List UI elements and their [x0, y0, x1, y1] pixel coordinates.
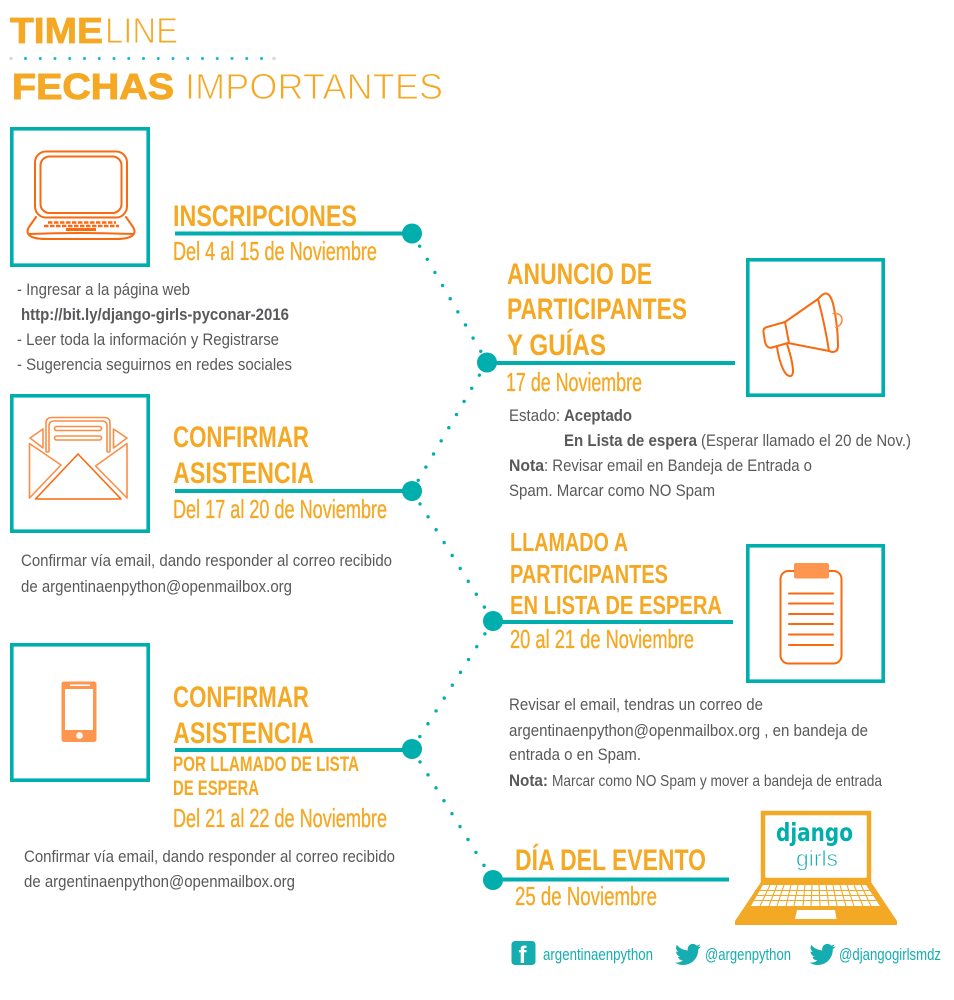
text block: revisar el email: entrada o en Spam. — [509, 745, 641, 764]
panel: inscripciones — [12, 129, 377, 374]
heading: anuncio de participantes y guias — [507, 258, 687, 362]
text block: estado: (Esperar llamado el 20 de Nov.) — [701, 431, 911, 450]
icon: laptop — [12, 129, 148, 265]
text block: revisar el email: Marcar como NO Spam y mover a bandeja de entrada — [552, 773, 882, 790]
heading: anuncio de participantes y guias: PARTICIPANTES — [507, 293, 687, 326]
heading: confirmar asistencia por llamado de lista de espera: DE ESPERA — [173, 777, 259, 800]
icon: twitter bird 2 — [810, 944, 835, 965]
icon: facebook: f — [518, 942, 528, 969]
heading: llamado a participantes en lista de espera: PARTICIPANTES — [510, 559, 668, 589]
title: timeline — [10, 10, 178, 51]
title: fechas importantes: FECHAS — [12, 66, 174, 107]
date: 25 de noviembre: 25 de Noviembre — [515, 881, 657, 911]
twitter handle: argenpython: @argenpython — [705, 945, 791, 964]
text block: inscripciones steps: - Ingresar a la página web — [17, 280, 190, 299]
text block: revisar el email: Revisar el email, tendras un correo de — [509, 695, 763, 714]
timeline connector: dots and lines — [175, 224, 735, 890]
date: del 17 al 20: Del 17 al 20 de Noviembre — [173, 494, 387, 524]
text block: estado: Nota — [509, 456, 545, 475]
icon: megaphone — [748, 260, 883, 395]
date: 17 de noviembre: 17 de Noviembre — [506, 367, 642, 397]
text block: revisar el email: argentinaenpython@openmailbox.org , en bandeja de — [509, 721, 868, 740]
text block: confirmar via email: de argentinaenpython@openmailbox.org — [21, 577, 292, 596]
heading: llamado a participantes en lista de espera: LLAMADO A — [510, 527, 628, 557]
text block: inscripciones steps: - Leer toda la información y Registrarse — [17, 330, 279, 349]
heading: anuncio de participantes y guias: Y GUÍAS — [507, 328, 606, 362]
date: 20 al 21: 20 al 21 de Noviembre — [510, 624, 694, 654]
header dotted divider — [9, 57, 276, 60]
text block: revisar el email: Nota: — [509, 771, 548, 790]
heading: llamado a participantes en lista de espera — [510, 527, 722, 620]
text block: confirmar via email lista de espera — [24, 847, 395, 891]
heading: dia del evento: DÍA DEL EVENTO — [515, 843, 706, 877]
title: fechas importantes: IMPORTANTES — [185, 66, 443, 107]
text block: estado: Estado: — [509, 406, 560, 425]
text block: confirmar via email lista de espera: de argentinaenpython@openmailbox.org — [24, 872, 295, 891]
icon: envelope — [12, 396, 148, 531]
title: timeline: TIME — [10, 10, 103, 51]
text block: inscripciones steps — [17, 280, 292, 374]
panel: confirmar asistencia por llamado — [12, 645, 395, 891]
icon: twitter bird 1 — [675, 944, 701, 965]
text block: confirmar via email lista de espera: Confirmar vía email, dando responder al correo recibido — [24, 847, 395, 866]
heading: llamado a participantes en lista de espera: EN LISTA DE ESPERA — [510, 590, 722, 620]
panel: dia del evento — [515, 813, 897, 925]
text block: estado: Aceptado — [564, 406, 632, 425]
social links — [512, 941, 941, 969]
panel: confirmar asistencia — [12, 396, 392, 596]
icon: smartphone — [12, 645, 148, 780]
date: inscripciones: Del 4 al 15 de Noviembre — [173, 236, 377, 266]
icon: django girls laptop: girls — [796, 846, 838, 871]
icon: facebook — [512, 941, 536, 969]
panel: llamado a participantes — [509, 527, 883, 790]
date: del 21 al 22: Del 21 al 22 de Noviembre — [173, 803, 387, 833]
text block: estado: En Lista de espera — [564, 431, 697, 450]
text block: confirmar via email — [21, 551, 392, 596]
heading: inscripciones: INSCRIPCIONES — [173, 200, 357, 233]
text block: revisar el email — [509, 695, 882, 790]
heading: confirmar asistencia por llamado de lista de espera: POR LLAMADO DE LISTA — [173, 753, 359, 776]
heading: confirmar asistencia por llamado de lista de espera: CONFIRMAR — [173, 681, 309, 714]
heading: confirmar asistencia: ASISTENCIA — [173, 457, 314, 490]
text block: inscripciones steps: http://bit.ly/django-girls-pyconar-2016 — [21, 305, 289, 324]
heading: anuncio de participantes y guias: ANUNCIO DE — [507, 258, 652, 291]
facebook handle: argentinaenpython — [543, 945, 653, 964]
title: timeline: LINE — [105, 10, 178, 51]
heading: confirmar asistencia por llamado de lista de espera: ASISTENCIA — [173, 717, 314, 750]
text block: estado — [509, 406, 911, 500]
text block: estado: Spam. Marcar como NO Spam — [509, 481, 715, 500]
icon: clipboard — [748, 546, 883, 681]
heading: confirmar asistencia: CONFIRMAR — [173, 421, 309, 454]
heading: confirmar asistencia por llamado de lista de espera — [173, 681, 359, 800]
icon: django girls laptop: django — [776, 818, 853, 847]
text block: estado: : Revisar email en Bandeja de Entrada o — [544, 456, 812, 475]
text block: inscripciones steps: - Sugerencia seguirnos en redes sociales — [17, 355, 292, 374]
panel: anuncio de participantes — [506, 258, 911, 500]
title: fechas importantes — [12, 66, 443, 107]
icon: django girls laptop — [735, 813, 897, 925]
heading: confirmar asistencia — [173, 421, 314, 490]
text block: confirmar via email: Confirmar vía email, dando responder al correo recibido — [21, 551, 392, 570]
